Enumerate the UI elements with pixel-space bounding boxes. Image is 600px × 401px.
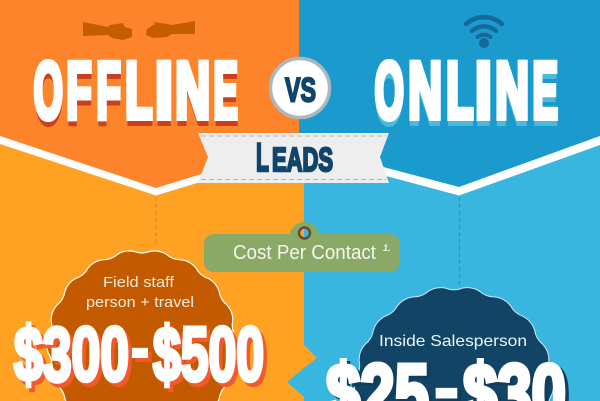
title: ONLINE: N — [408, 46, 441, 136]
panel: offline header — [0, 0, 299, 188]
title: ONLINE: I — [474, 46, 491, 136]
title: ONLINE: L — [447, 46, 474, 136]
text: E — [532, 46, 557, 136]
title: ONLINE: O — [374, 46, 403, 136]
dashed connector: offline — [155, 197, 157, 246]
title: OFFLINE: L — [125, 46, 151, 136]
badge: online cost — [354, 288, 554, 401]
VS badge: VS — [285, 72, 316, 110]
ribbon: Leads: EADS — [272, 141, 333, 178]
title: ONLINE: N — [408, 50, 442, 142]
title: ONLINE: N — [495, 50, 529, 142]
price: $300-$500: $300 — [14, 312, 129, 398]
title: OFFLINE: O — [34, 50, 63, 142]
title: OFFLINE: N — [175, 46, 209, 136]
ribbon: Leads — [198, 133, 389, 183]
price: $25-$30 — [326, 342, 570, 401]
title: OFFLINE: F — [67, 46, 92, 136]
panel: online lower background — [304, 130, 600, 401]
text: inside salesperson label: Inside Salesperson — [379, 333, 527, 350]
text: E — [213, 46, 237, 136]
title: ONLINE: N — [409, 46, 442, 136]
title: ONLINE: N — [495, 46, 528, 136]
title: ONLINE: I — [475, 50, 492, 142]
text: E — [214, 50, 238, 142]
VS badge — [270, 58, 330, 118]
text: E — [534, 46, 558, 136]
title: OFFLINE: F — [97, 50, 121, 142]
price: $300-$500: $500 — [153, 312, 264, 398]
title: OFFLINE: F — [96, 46, 120, 136]
title: OFFLINE: I — [154, 46, 172, 136]
title: OFFLINE: I — [155, 50, 173, 142]
title: OFFLINE: F — [97, 46, 121, 136]
ribbon: Leads: L — [256, 136, 269, 180]
title: OFFLINE: F — [67, 50, 92, 142]
title: OFFLINE: O — [35, 46, 63, 136]
white chevron: offline — [0, 136, 299, 196]
icon: shaking hands, left arm — [83, 22, 132, 40]
title: OFFLINE: N — [176, 46, 211, 136]
price: $300-$500: $300 — [18, 316, 132, 401]
white chevron: online — [304, 136, 600, 196]
panel: offline lower background — [0, 130, 304, 401]
title: OFFLINE — [33, 46, 238, 142]
text: E — [214, 46, 238, 136]
arrow: blue point into orange panel — [287, 368, 304, 397]
title: OFFLINE: I — [156, 46, 174, 136]
title: OFFLINE: O — [33, 46, 62, 136]
title: ONLINE: L — [446, 50, 473, 142]
arrow: orange point into blue panel — [304, 345, 317, 368]
text: field staff label: Field staff — [103, 274, 175, 291]
tag: cost per contact: 1. — [383, 243, 391, 253]
price: $300-$500: - — [130, 304, 150, 390]
title: OFFLINE: N — [176, 50, 210, 142]
panel: online header — [299, 0, 600, 187]
title: ONLINE — [374, 46, 558, 142]
text: E — [533, 50, 558, 142]
title: ONLINE: O — [375, 50, 403, 142]
text: field staff label: person + travel — [86, 294, 194, 311]
title: ONLINE: N — [496, 46, 529, 136]
title: OFFLINE: L — [126, 46, 153, 136]
text: field staff label — [86, 274, 194, 311]
tag: cost per contact — [204, 222, 400, 272]
price: $300-$500: $500 — [156, 316, 268, 401]
title: OFFLINE: L — [126, 50, 152, 142]
badge: offline cost — [47, 251, 237, 401]
dashed connector: online — [458, 197, 460, 286]
icon: wifi — [466, 17, 502, 48]
title: ONLINE: O — [376, 46, 404, 136]
price: $300-$500: - — [134, 308, 154, 394]
title: ONLINE: L — [446, 46, 472, 136]
title: OFFLINE: F — [66, 46, 91, 136]
price: $300-$500 — [14, 304, 268, 401]
tag: cost per contact: Cost Per Contact — [233, 242, 376, 264]
title: ONLINE: I — [476, 46, 493, 136]
icon: shaking hands, right arm — [146, 21, 195, 38]
